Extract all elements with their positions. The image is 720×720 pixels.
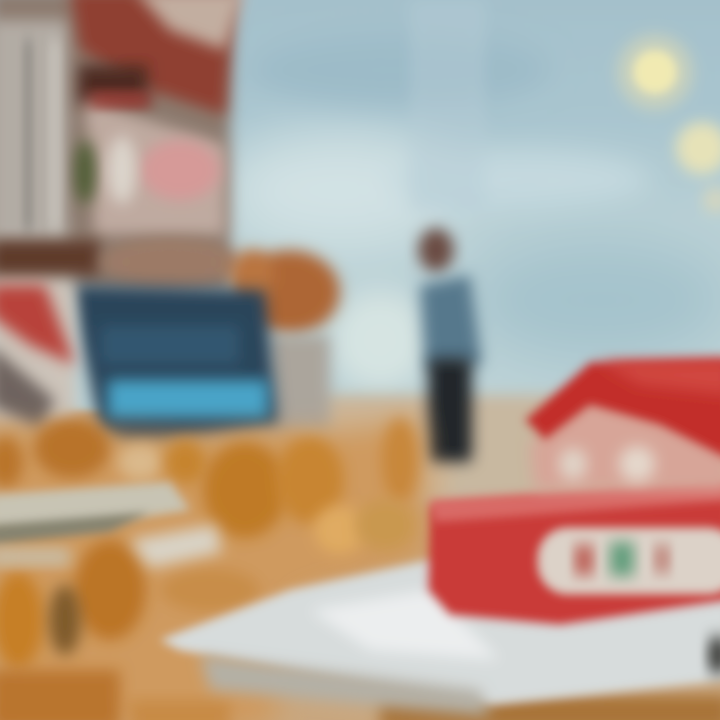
brown round shape — [230, 249, 340, 334]
red house — [525, 358, 720, 490]
red box — [428, 480, 720, 625]
grey pillar — [268, 335, 330, 430]
child figure — [418, 228, 482, 462]
ground — [300, 395, 720, 505]
building on the left — [0, 0, 245, 290]
dark object corner — [708, 635, 720, 675]
white papers left — [0, 482, 222, 568]
sky background — [0, 0, 720, 410]
blue panel — [70, 285, 278, 445]
glowing lights — [617, 34, 720, 213]
red and white awning — [0, 280, 75, 430]
gold coins — [0, 418, 720, 720]
white paper stack — [160, 560, 720, 716]
